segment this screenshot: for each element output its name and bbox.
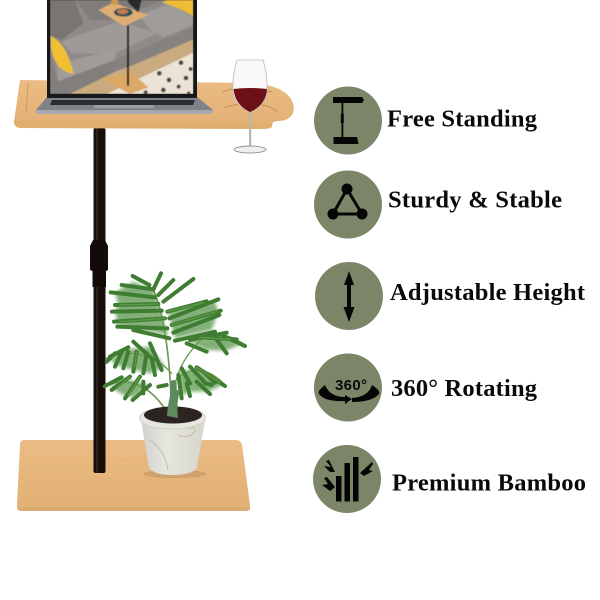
plant <box>103 273 245 415</box>
icon: 360 degree rotation <box>314 354 382 422</box>
label: Sturdy & Stable: Sturdy & Stable <box>388 186 562 214</box>
icon: bamboo stalks <box>313 445 381 513</box>
pole <box>90 128 108 473</box>
soil <box>144 406 202 424</box>
plant foliage mass <box>110 282 240 397</box>
icon: 360 degree rotation: 360° <box>335 377 367 394</box>
label: Adjustable Height: Adjustable Height <box>390 279 586 306</box>
icon: triangle of three points <box>314 170 382 238</box>
feature: Premium Bamboo <box>313 445 586 513</box>
feature: 360 Rotating <box>314 354 538 422</box>
label: 360 Rotating: 360° Rotating <box>391 375 538 402</box>
feature: Sturdy & Stable <box>314 170 562 238</box>
pot <box>140 390 206 475</box>
label: Free Standing: Free Standing <box>387 106 538 132</box>
plant leaflets dark <box>105 273 245 400</box>
feature: Adjustable Height <box>315 262 586 330</box>
icon: free standing table <box>314 86 382 154</box>
icon: vertical double arrow <box>315 262 383 330</box>
plant leaflets light <box>117 303 230 395</box>
laptop screen photo <box>50 0 193 95</box>
wine glass <box>233 60 267 153</box>
table top <box>14 80 294 129</box>
base board <box>17 440 250 511</box>
label: Premium Bamboo: Premium Bamboo <box>392 470 586 496</box>
laptop keyboard deck <box>36 94 213 114</box>
plant stems <box>103 290 245 415</box>
feature: Free Standing <box>314 86 538 154</box>
laptop <box>36 0 213 114</box>
